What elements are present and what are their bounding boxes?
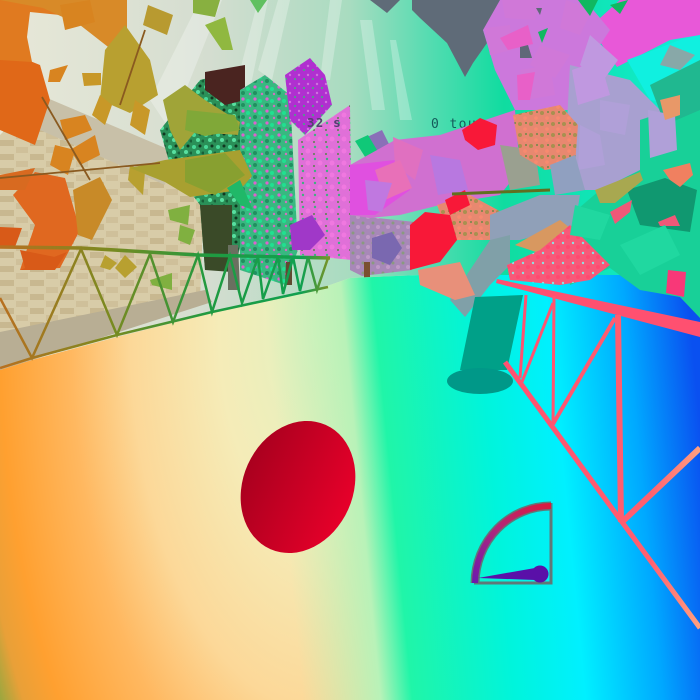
small leaves upper cluster [485, 0, 592, 100]
tree: magenta [285, 58, 352, 285]
olive branch [452, 190, 550, 194]
magenta foliage top right [590, 0, 700, 67]
grey green leaves [500, 145, 540, 190]
salmon speckled foliage [513, 105, 578, 170]
pink red speckled foliage [507, 225, 610, 285]
wall roof band [40, 95, 170, 185]
tree trunk [460, 295, 523, 370]
tree: teal green [240, 75, 298, 285]
walkway below wall [0, 290, 212, 370]
red foliage [410, 118, 497, 270]
teal foliage right [565, 100, 700, 318]
timer text: 32 s [307, 115, 342, 130]
tree: dark green [160, 65, 250, 272]
magenta foliage left [350, 160, 410, 215]
curtain streaks [150, 0, 412, 130]
orange mass [0, 55, 50, 145]
top green leaves [193, 0, 220, 17]
sky background [0, 0, 700, 400]
right foliage [350, 0, 700, 318]
ground [0, 275, 700, 700]
grey rock at top [370, 0, 517, 77]
lavender leaves [578, 100, 677, 170]
mauve foliage mid [350, 110, 520, 218]
left foliage [0, 0, 267, 290]
gauge frame [474, 503, 551, 583]
cyan gap [627, 35, 700, 110]
salmon speckled foliage lower [437, 195, 507, 240]
trunk: green tree [228, 245, 240, 290]
orange leaves [515, 220, 570, 255]
mauve foliage top [483, 0, 610, 110]
grey blue leaves [490, 195, 580, 240]
olive leaves upper band [163, 85, 240, 150]
scattered autumn leaves [48, 0, 100, 175]
trunk shadow [447, 368, 513, 394]
gauge needle [478, 568, 535, 580]
far right fence section [418, 262, 475, 300]
orange lower mass [13, 172, 80, 270]
pale gap in wall [200, 172, 218, 205]
gold mass [100, 25, 158, 113]
back trees [160, 58, 415, 290]
gauge arc [475, 506, 551, 583]
touches text: 0 tour [431, 117, 486, 132]
red ball [220, 403, 376, 571]
accent leaves [595, 172, 643, 203]
olive leaves lower band [130, 150, 252, 197]
left fence [0, 247, 330, 368]
tree: mauve [350, 130, 415, 280]
gauge hub [532, 566, 548, 582]
gauge [474, 503, 551, 583]
branches [0, 30, 160, 180]
lavender foliage [565, 65, 680, 190]
brick wall [0, 95, 218, 370]
right fence [496, 279, 700, 628]
